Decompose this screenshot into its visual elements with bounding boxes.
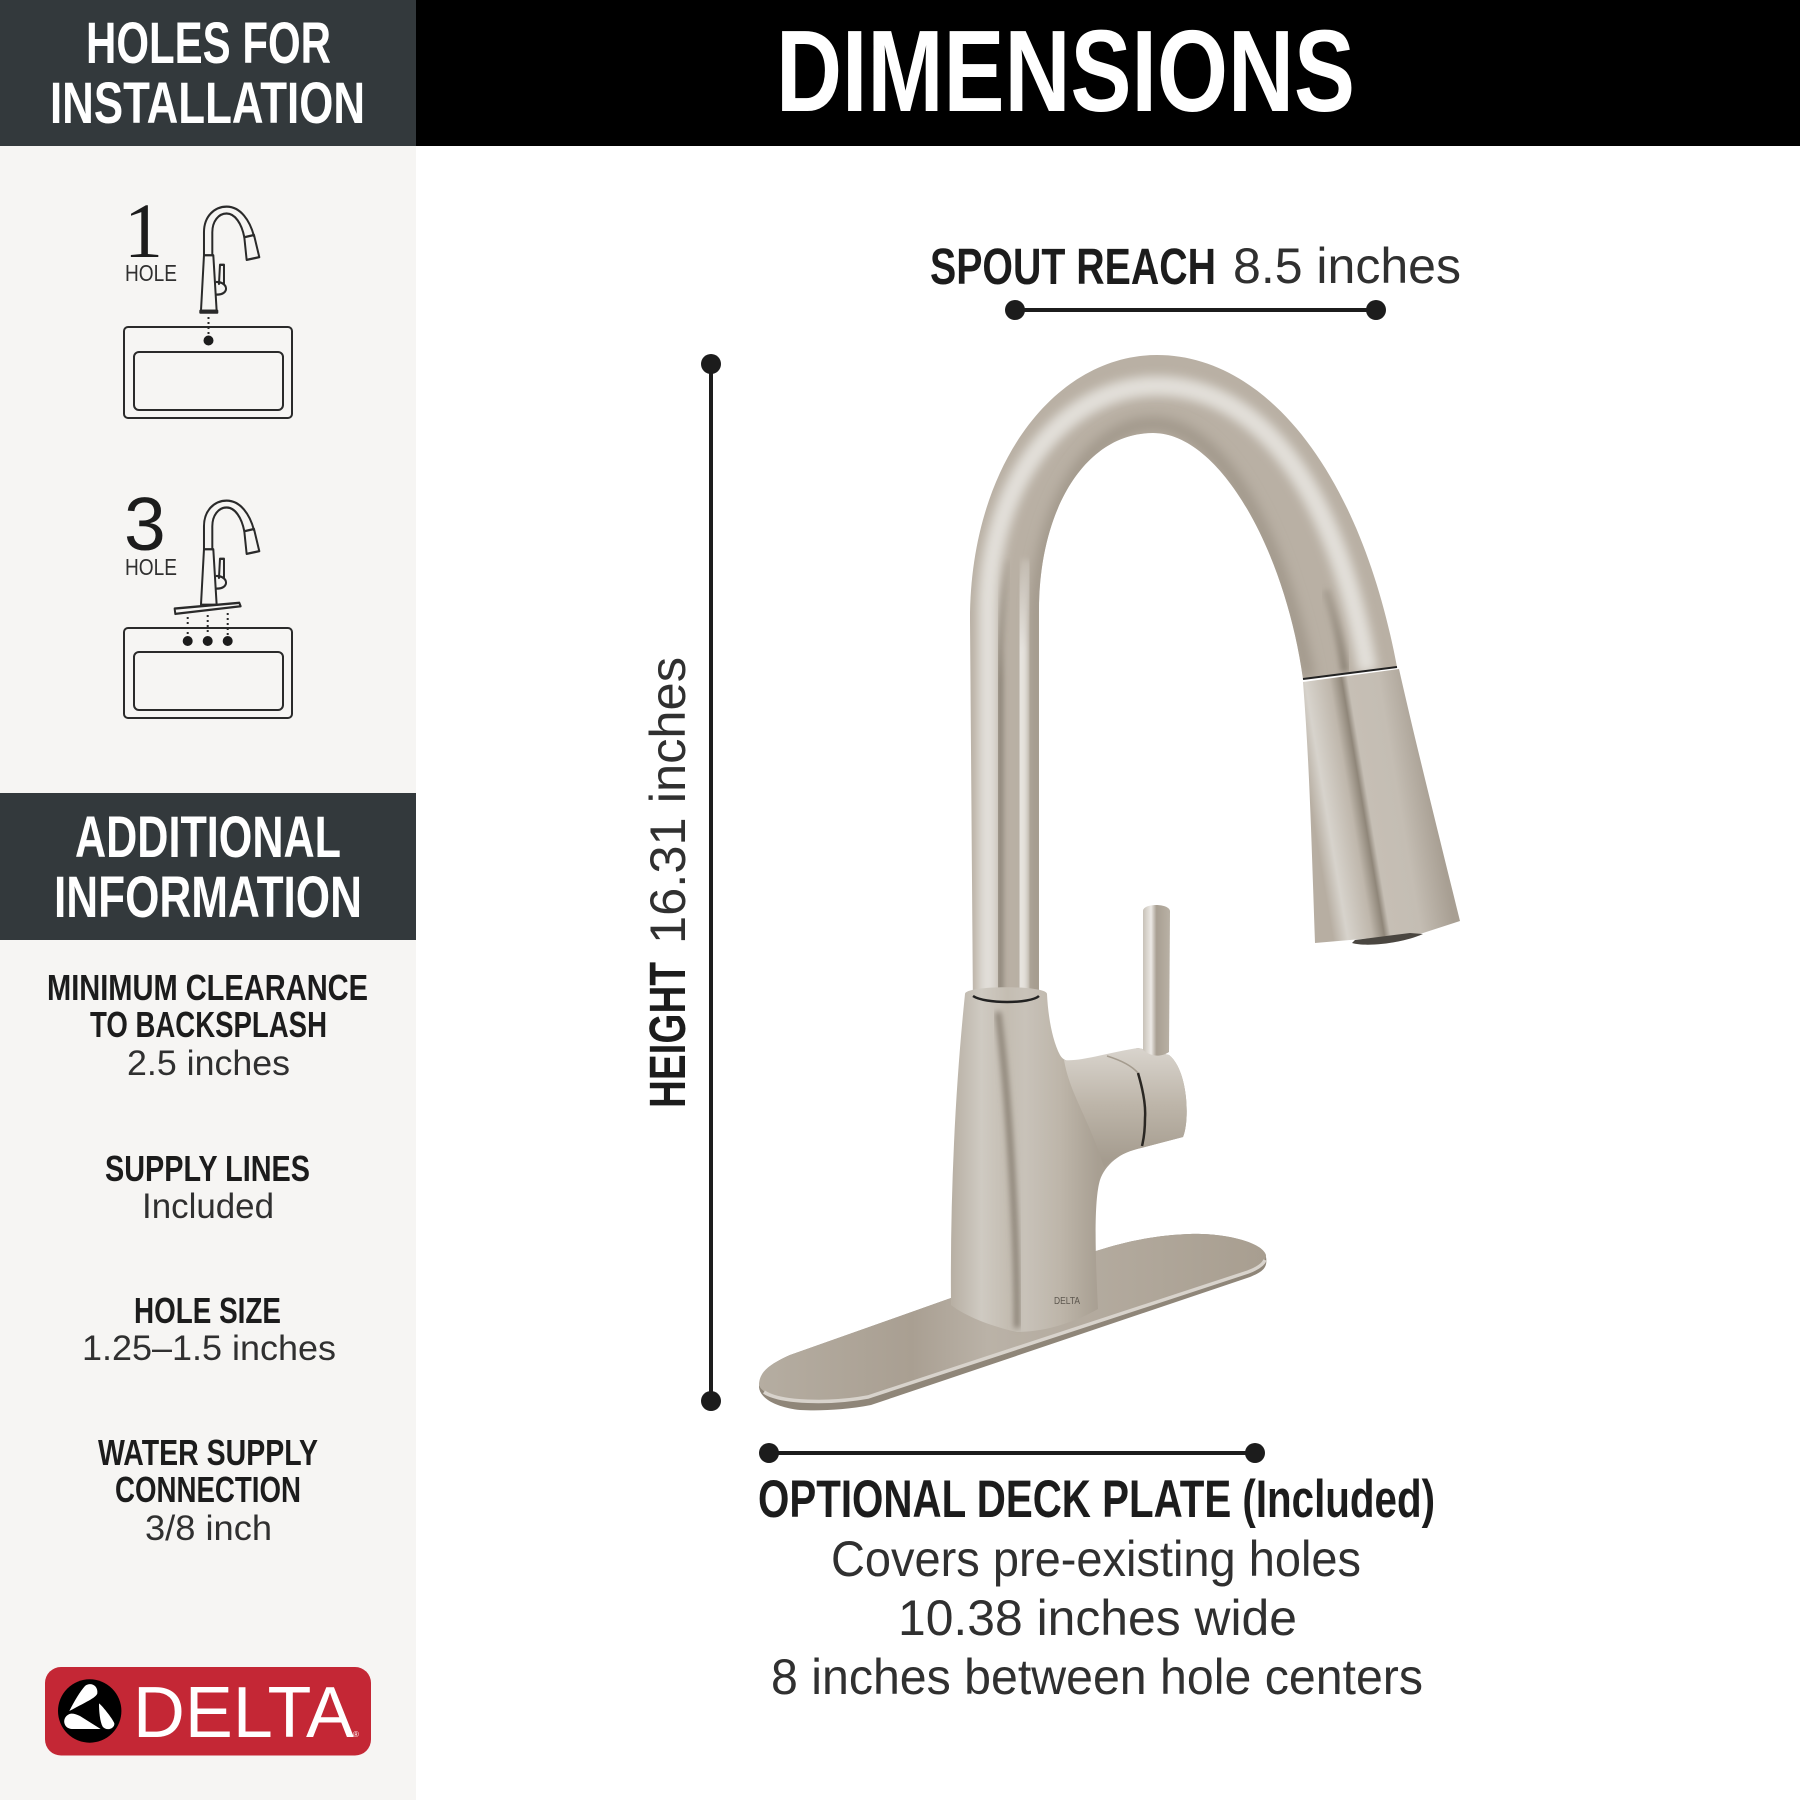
label: 3 hole (124, 482, 177, 580)
info: supply lines: SUPPLY LINES (105, 1148, 310, 1189)
icon group: 3 hole installation (124, 482, 292, 718)
title banner: dimensions (416, 0, 1800, 146)
text block: optional deck plate: 8 inches between hole centers (771, 1649, 1423, 1705)
lever handle (1143, 905, 1170, 1056)
base body: DELTA (1054, 1296, 1080, 1307)
icon: sink with three holes (124, 613, 292, 718)
info: minimum clearance (47, 967, 368, 1083)
label: 1 hole: 1 (124, 187, 163, 274)
dimension line: height (701, 354, 721, 1411)
label: 3 hole: HOLE (125, 554, 177, 580)
header: additional information (0, 793, 416, 940)
header: additional information: ADDITIONAL (75, 805, 341, 870)
dimension: height label: 16.31 inches (640, 657, 696, 944)
dimension: spout reach label (930, 238, 1461, 295)
dimension line: deck plate (759, 1443, 1265, 1463)
base body (951, 987, 1187, 1332)
header: holes for installation: HOLES FOR (86, 11, 331, 76)
icon: faucet outline with deck plate (175, 501, 259, 614)
text block: optional deck plate: Covers pre-existing holes (831, 1531, 1361, 1587)
info: hole size: HOLE SIZE (134, 1290, 281, 1331)
header: additional information: INFORMATION (54, 865, 362, 930)
logo: delta: DELTA (133, 1673, 354, 1753)
label: 1 hole (124, 187, 177, 286)
icon: faucet outline (200, 207, 259, 313)
dimension: height label: HEIGHT (639, 962, 696, 1108)
text block: optional deck plate: 10.38 inches wide (898, 1590, 1297, 1646)
logo: delta (45, 1667, 371, 1756)
spout tube (970, 355, 1397, 1010)
header: holes for installation (0, 0, 416, 146)
dimension: spout reach label: 8.5 inches (1233, 238, 1461, 294)
spray head (1303, 667, 1460, 945)
faucet photo illustration (759, 355, 1460, 1410)
icon group: 1 hole installation (124, 187, 292, 418)
info: water supply connection: CONNECTION (115, 1469, 301, 1510)
dimension line: spout reach (1005, 300, 1386, 320)
logo: delta: ® (353, 1730, 359, 1739)
info: minimum clearance: MINIMUM CLEARANCE (47, 967, 368, 1008)
dimension: spout reach label: SPOUT REACH (930, 238, 1216, 295)
info: supply lines: Included (142, 1187, 274, 1226)
label: 1 hole: HOLE (125, 260, 177, 286)
header: holes for installation: INSTALLATION (50, 71, 365, 136)
title banner: dimensions: DIMENSIONS (776, 6, 1355, 136)
info: minimum clearance: 2.5 inches (127, 1044, 290, 1083)
panel: sidebar background (0, 0, 416, 1800)
info: water supply connection: 3/8 inch (145, 1509, 272, 1548)
info: hole size (82, 1290, 336, 1368)
label: 3 hole: 3 (124, 482, 166, 566)
text block: optional deck plate: OPTIONAL DECK PLATE (Included) (758, 1470, 1435, 1529)
info: minimum clearance: TO BACKSPLASH (90, 1004, 327, 1045)
info: supply lines (105, 1148, 310, 1226)
text block: optional deck plate (758, 1470, 1435, 1705)
info: hole size: 1.25–1.5 inches (82, 1329, 336, 1368)
info: water supply connection: WATER SUPPLY (98, 1432, 318, 1473)
deck plate (759, 1234, 1266, 1410)
icon: sink with one hole (124, 317, 292, 418)
info: water supply connection (98, 1432, 318, 1548)
dimension: height label (639, 657, 696, 1108)
